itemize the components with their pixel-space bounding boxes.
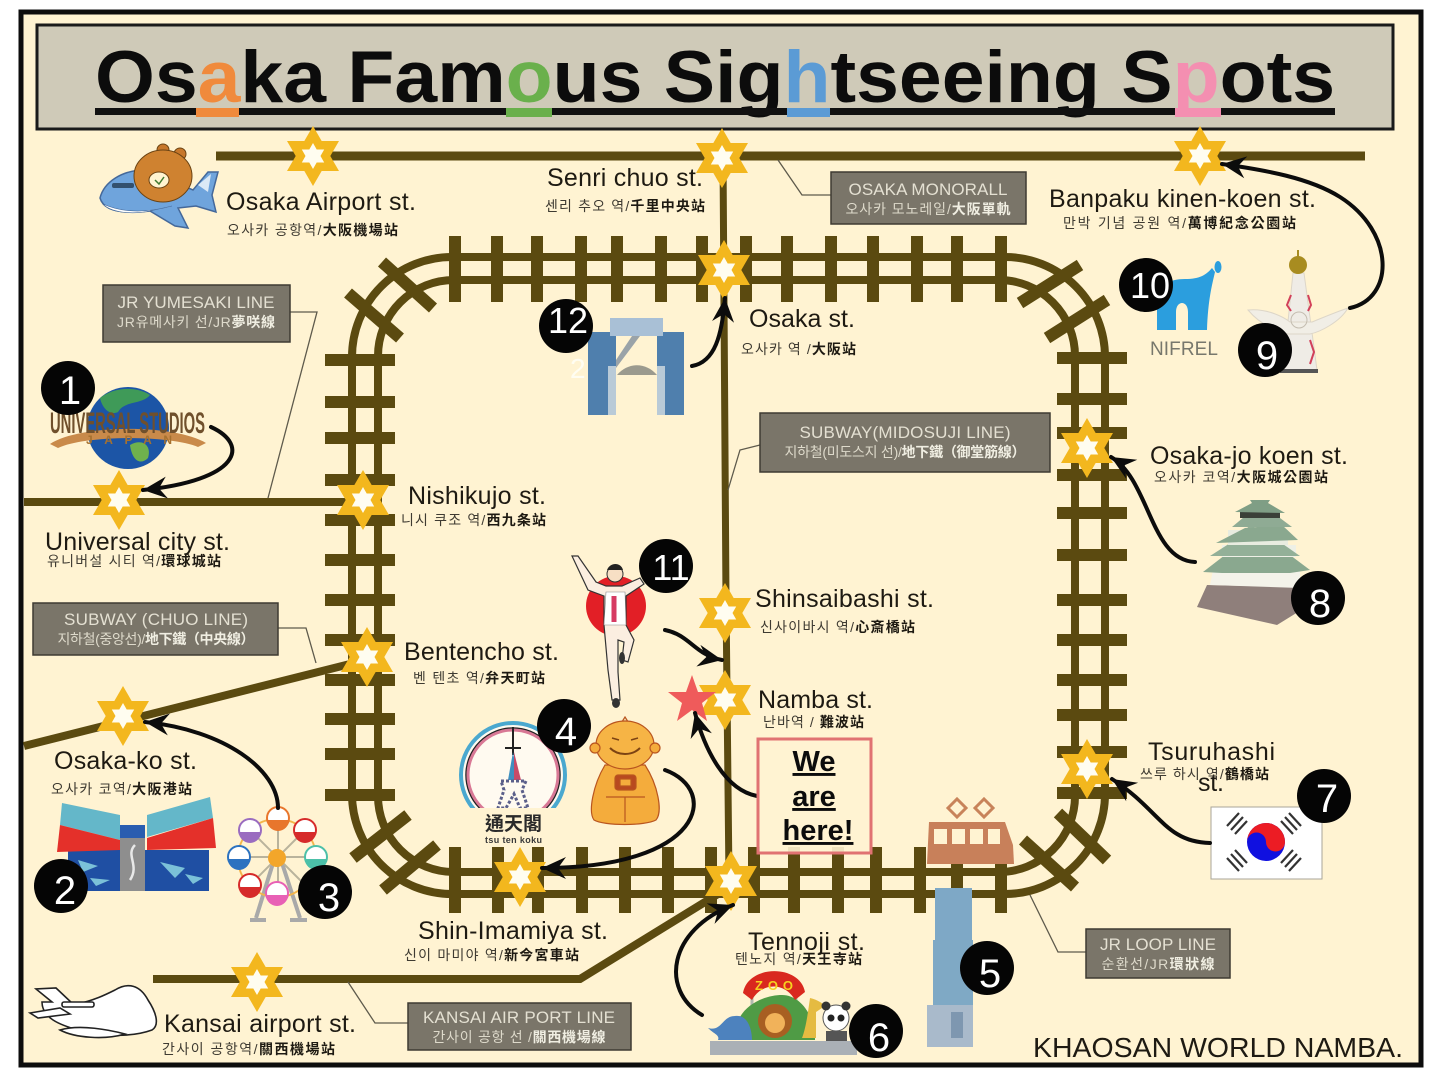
icon: Umeda Sky Building xyxy=(570,318,684,415)
label: Osaka Airport st.: 오사카 공항역/大阪機場站 xyxy=(227,222,398,238)
label: Tsuruhashi st. xyxy=(1140,738,1275,797)
line label: Kansai Airport: KANSAI AIR PORT LINE xyxy=(423,1008,615,1027)
connector lines to line labels xyxy=(268,160,1086,1023)
label: Osaka-jo koen st.: Osaka-jo koen st. xyxy=(1150,442,1348,470)
number badges: 5 xyxy=(979,952,1001,996)
credit: Khaosan World Namba: KHAOSAN WORLD NAMBA. xyxy=(1033,1032,1403,1063)
label: Shin-Imamiya st. xyxy=(404,917,608,963)
label: Banpaku kinen-koen st.: 만박 기념 공원 역/萬博紀念公園站 xyxy=(1063,215,1296,231)
callout: We are here xyxy=(758,739,871,853)
icon: blue plane with bear xyxy=(100,144,218,228)
icon: Osaka castle xyxy=(1197,500,1310,625)
label: Osaka st.: 오사카 역 /大阪站 xyxy=(741,341,856,357)
red star: current location xyxy=(668,675,716,721)
label: Shinsaibashi st. xyxy=(755,585,934,635)
label: Shin-Imamiya st.: Shin-Imamiya st. xyxy=(418,917,608,945)
icon: Tower of the Sun xyxy=(1248,250,1348,373)
arrow: Korea town to Tsuruhashi xyxy=(1112,779,1210,843)
line label: JR Loop: JR LOOP LINE xyxy=(1100,935,1216,954)
arrow: Zoo to Tennoji xyxy=(676,905,733,1015)
line label: Kansai Airport xyxy=(408,1003,631,1050)
line label: Subway Chuo: SUBWAY (CHUO LINE) xyxy=(64,610,248,629)
icon: Osaka aquarium xyxy=(57,797,216,891)
label: Osaka st.: Osaka st. xyxy=(749,305,855,333)
label: Osaka-jo koen st.: 오사카 코역/大阪城公園站 xyxy=(1154,469,1328,485)
arrow: Tower of the Sun to Banpaku station xyxy=(1222,164,1383,308)
line label: Subway Midosuji: 지하철(미도스지 선)/地下鐵（御堂筋線） xyxy=(784,444,1026,460)
line label: Osaka Monorail: 오사카 모노레일/大阪單軌 xyxy=(846,201,1010,217)
label: Osaka-ko st.: 오사카 코역/大阪港站 xyxy=(51,781,192,797)
number badges: 8 xyxy=(1309,582,1331,626)
label: Kansai airport st.: 간사이 공항역/關西機場站 xyxy=(162,1041,335,1057)
icon: Nifrel logo: NIFREL xyxy=(1150,339,1218,360)
callout: We are here: here! xyxy=(783,815,853,847)
label: Banpaku kinen-koen st. xyxy=(1049,185,1316,231)
label: Bentencho st. xyxy=(404,638,559,686)
number badges: 6 xyxy=(868,1016,890,1060)
number badges: 3 xyxy=(318,876,340,920)
number badges: 1 xyxy=(59,369,81,413)
arrow: We are here to Namba xyxy=(695,713,757,796)
line label: JR Loop: 순환선/JR環狀線 xyxy=(1102,956,1214,972)
label: Tennoji st.: Tennoji st. xyxy=(748,928,865,956)
label: Shinsaibashi st.: 신사이바시 역/心斎橋站 xyxy=(760,619,915,635)
label: Tsuruhashi st.: Tsuruhashi xyxy=(1148,738,1275,766)
icon: Korean flag xyxy=(1211,807,1322,879)
icon: Umeda Sky Building: 2 xyxy=(570,353,586,384)
JR loop line track xyxy=(325,236,1127,913)
label: Universal city st.: 유니버설 시티 역/環球城站 xyxy=(47,553,221,569)
line label: Subway Chuo xyxy=(33,603,278,655)
label: Shin-Imamiya st.: 신이 마미야 역/新今宮車站 xyxy=(404,947,579,963)
label: Nishikujo st.: Nishikujo st. xyxy=(408,482,546,510)
icon: Tsutenkaku logo: 通天閣 xyxy=(485,813,542,835)
label: Osaka-ko st.: Osaka-ko st. xyxy=(54,747,197,775)
arrow: Universal Studios to Universal city station xyxy=(143,427,232,490)
number badges xyxy=(34,258,1351,1060)
line label: Osaka Monorail: OSAKA MONORALL xyxy=(848,180,1008,199)
callout: We are here: are xyxy=(792,781,836,813)
Osaka monorail line xyxy=(216,152,1365,160)
line label: JR Yumesaki: JR YUMESAKI LINE xyxy=(118,293,274,312)
label: Osaka Airport st. xyxy=(226,188,416,238)
subway Chuo line xyxy=(24,660,366,746)
subway Midosuji line xyxy=(723,156,729,880)
label: Nishikujo st.: 니시 쿠조 역/西九条站 xyxy=(401,512,546,528)
title banner: Osaka Famous Sightseeing Spots xyxy=(95,37,1335,118)
icon: tram xyxy=(927,799,1014,864)
label: Tsuruhashi st.: 쓰루 하시 역/鶴橋站 xyxy=(1140,766,1269,782)
label: Bentencho st.: Bentencho st. xyxy=(404,638,559,666)
label: Banpaku kinen-koen st.: Banpaku kinen-koen st. xyxy=(1049,185,1316,213)
number badges: 7 xyxy=(1316,777,1338,821)
arrow: Ferris wheel to Osaka-ko xyxy=(145,722,278,808)
callout: We are here: We xyxy=(793,746,835,778)
label: Osaka-ko st. xyxy=(51,747,197,797)
icon: Universal Studios Japan logo xyxy=(50,387,206,469)
icon: Tennoji zoo gate xyxy=(708,971,857,1055)
number badges: 11 xyxy=(652,547,690,588)
line label: Subway Chuo: 지하철(중앙선)/地下鐵（中央線） xyxy=(58,631,254,647)
label: Namba st.: Namba st. xyxy=(758,686,873,714)
label: Kansai airport st.: Kansai airport st. xyxy=(164,1010,356,1038)
number badges: 10 xyxy=(1130,265,1170,306)
label: Senri chuo st.: Senri chuo st. xyxy=(547,164,703,192)
station stars xyxy=(93,126,1226,1012)
icon: white airplane xyxy=(30,986,156,1037)
icon: Universal Studios Japan logo: JAPAN xyxy=(86,433,172,447)
label: Osaka Airport st.: Osaka Airport st. xyxy=(226,188,416,216)
label: Tennoji st.: 텐노지 역/天王寺站 xyxy=(735,951,862,967)
line label: Subway Midosuji xyxy=(760,413,1050,472)
icon: Glico running man xyxy=(572,556,646,708)
label: Osaka-jo koen st. xyxy=(1150,442,1348,485)
Kansai airport line xyxy=(153,886,731,979)
label: Universal city st.: Universal city st. xyxy=(45,528,230,556)
icon: Abeno Harukas tower xyxy=(927,888,973,1047)
icon: Ferris wheel xyxy=(228,807,327,920)
icon: Billiken statue xyxy=(590,717,660,824)
label: Senri chuo st.: 센리 추오 역/千里中央站 xyxy=(545,198,705,214)
label: Kansai airport st. xyxy=(162,1010,356,1057)
label: Osaka st. xyxy=(741,305,856,357)
label: Universal city st. xyxy=(45,528,230,569)
icon: Tsutenkaku logo: tsu ten koku xyxy=(485,835,542,845)
line label: Osaka Monorail xyxy=(831,172,1026,224)
line label: Kansai Airport: 간사이 공항 선 /關西機場線 xyxy=(432,1029,606,1045)
number badges: 9 xyxy=(1256,334,1278,378)
label: Nishikujo st. xyxy=(401,482,546,528)
arrow: Tsutenkaku to Shin-Imamiya xyxy=(542,770,694,868)
number badges: 12 xyxy=(548,300,588,341)
icon: Tsutenkaku logo xyxy=(461,723,565,845)
label: Namba st. xyxy=(758,686,873,730)
arrow: castle to Osaka-jo koen xyxy=(1111,457,1195,562)
line label: JR Loop xyxy=(1086,929,1230,978)
label: Bentencho st.: 벤 텐초 역/弁天町站 xyxy=(413,670,545,686)
text: UNIVERSAL STUDIOS xyxy=(50,407,205,440)
label: Shinsaibashi st.: Shinsaibashi st. xyxy=(755,585,934,613)
line label: JR Yumesaki: JR유메사키 선/JR夢咲線 xyxy=(117,314,275,330)
arrow: Umeda Sky to Osaka station xyxy=(692,298,725,366)
icon: Tennoji zoo gate: ZOO xyxy=(755,978,793,993)
label: Namba st.: 난바역 / 難波站 xyxy=(763,714,864,730)
icon: Nifrel logo xyxy=(1150,261,1222,360)
arrow: Glico man to Midosuji line xyxy=(665,630,722,660)
label: Tsuruhashi st.: st. xyxy=(1198,769,1224,797)
line label: JR Yumesaki xyxy=(103,285,290,342)
line label: Subway Midosuji: SUBWAY(MIDOSUJI LINE) xyxy=(800,423,1010,442)
number badges: 2 xyxy=(54,869,76,913)
label: Senri chuo st. xyxy=(545,164,705,214)
JR Yumesaki line xyxy=(24,498,360,506)
number badges: 4 xyxy=(555,710,577,754)
label: Tennoji st. xyxy=(735,928,865,967)
